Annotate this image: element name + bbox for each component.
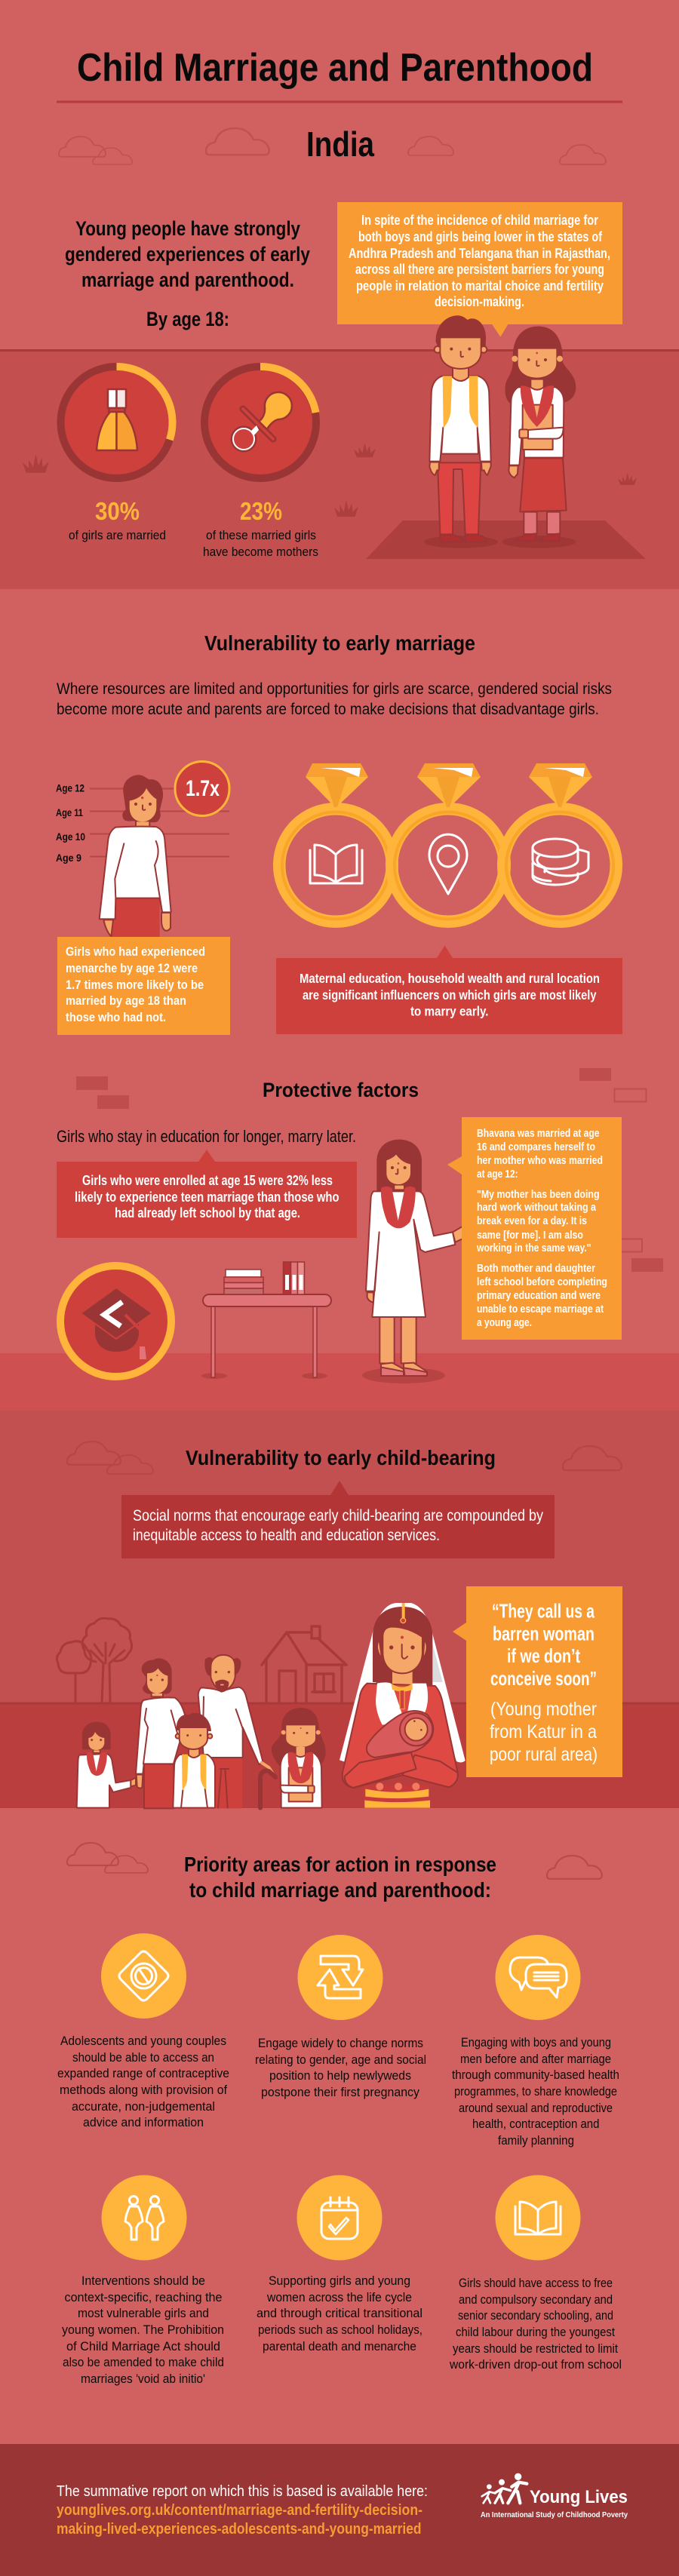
illustration: girl at height chart xyxy=(100,775,171,938)
priority 6: free schooling: and compulsory secondary and xyxy=(459,2292,613,2307)
callout: barren woman quote: conceive soon” xyxy=(490,1667,597,1690)
stat: 23%: of these married girls xyxy=(206,529,316,542)
stat: 30% xyxy=(69,497,166,542)
callout: orange speech box: both boys and girls being lower in the states of xyxy=(358,229,603,244)
footer panel: making-lived-experiences-adolescents-and-young-married xyxy=(57,2521,421,2538)
illustration: family group xyxy=(77,1655,275,1808)
paragraph: limited resources xyxy=(57,680,612,718)
priority 6: free schooling: years should be restricted to limit xyxy=(453,2341,618,2356)
priority 4: context-specific: young women. The Prohibition xyxy=(62,2323,224,2337)
priority 6: free schooling xyxy=(449,2175,622,2372)
callout: Bhavana story xyxy=(447,1117,622,1340)
grandfather xyxy=(198,1655,275,1808)
rings: wealth xyxy=(503,763,616,922)
callout: enrolled at age 15: Girls who were enrolled at age 15 were 32% less xyxy=(82,1173,333,1188)
subtitle: India: India xyxy=(306,124,374,164)
icon: coins xyxy=(533,839,588,885)
callout: menarche: menarche by age 12 were xyxy=(66,961,198,975)
intro text: gendered experiences of early xyxy=(65,243,310,266)
intro text: By age 18: xyxy=(146,308,229,330)
callout: Bhavana story: Both mother and daughter xyxy=(477,1262,595,1275)
illustration: woman pointing xyxy=(362,1140,468,1383)
illustration: table and books xyxy=(201,1262,331,1379)
callout: Bhavana story: same [for me]. I am also xyxy=(477,1229,583,1242)
heading: priority areas xyxy=(184,1853,496,1902)
callout: menarche: 1.7 times more likely to be xyxy=(66,978,204,992)
heading: vulnerability to early marriage: Vulnerability to early marriage xyxy=(204,631,475,655)
priority 4: context-specific: context-specific, reaching the xyxy=(65,2290,222,2304)
illustration: trees xyxy=(57,1618,132,1702)
illustration: teen girl and bride xyxy=(272,1603,465,1808)
teen girl xyxy=(272,1708,326,1808)
callout: Bhavana story: primary education and were xyxy=(477,1289,601,1302)
priority 1: contraceptive methods: methods along with provision of xyxy=(60,2083,227,2097)
priority 5: life cycle support: and through critical transitional xyxy=(257,2306,422,2320)
priority 1: contraceptive methods: advice and information xyxy=(83,2115,204,2129)
callout: barren woman quote: (Young mother xyxy=(490,1699,597,1720)
priority 3: boys and young men: men before and after marriage xyxy=(460,2052,611,2066)
callout: barren woman quote: “They call us a xyxy=(492,1599,595,1622)
callout: Bhavana story: Bhavana was married at age xyxy=(477,1127,599,1140)
icon: prohibition sign xyxy=(119,1951,168,2000)
callout: influencers: are significant influencers on which girls are most likely xyxy=(303,987,597,1002)
callout: influencers xyxy=(276,946,622,1034)
heading: priority areas: Priority areas for action in response xyxy=(184,1853,496,1876)
callout: influencers: to marry early. xyxy=(410,1003,489,1018)
priority 2: change norms xyxy=(255,1935,426,2099)
title: Child Marriage and Parenthood xyxy=(77,46,593,90)
callout: barren woman quote: barren woman xyxy=(493,1622,595,1644)
logo: Young Lives: Young Lives xyxy=(530,2487,628,2507)
priority 2: change norms: postpone their first pregnancy xyxy=(261,2085,419,2099)
priority 1: contraceptive methods: should be able to access an xyxy=(72,2050,214,2065)
priority 1: contraceptive methods: expanded range of contraceptive xyxy=(57,2066,229,2080)
callout: orange speech box: people in relation to marital choice and fertility xyxy=(356,278,604,293)
callout: orange speech box xyxy=(337,202,622,324)
callout: menarche: Girls who had experienced xyxy=(66,944,205,959)
logo: Young Lives: An International Study of Childhood Poverty xyxy=(481,2510,628,2519)
callout: Bhavana story: "My mother has been doing xyxy=(477,1188,599,1201)
icon: two women xyxy=(125,2197,164,2240)
priority 5: life cycle support: Supporting girls and young xyxy=(269,2274,410,2288)
clouds: priority section xyxy=(67,1843,602,1879)
priority 3: boys and young men xyxy=(452,1935,619,2148)
paragraph: limited resources: become more acute and parents are forced to make decisions that disadvantage girls. xyxy=(57,701,599,718)
icon: speech bubbles xyxy=(510,1957,567,1997)
priority 4: context-specific: also be amended to make child xyxy=(63,2355,224,2369)
intro text: marriage and parenthood. xyxy=(81,269,294,291)
boy xyxy=(173,1713,215,1808)
callout: enrolled at age 15: likely to experience teen marriage than those who xyxy=(75,1190,340,1205)
priority 4: context-specific: of Child Marriage Act should xyxy=(66,2339,220,2353)
stat: 30%: 30% xyxy=(95,497,140,525)
priority 4: context-specific xyxy=(62,2175,224,2386)
priority 4: context-specific: Interventions should be xyxy=(81,2274,205,2288)
books: upright xyxy=(284,1262,305,1294)
callout: Bhavana story: unable to escape marriage at xyxy=(477,1303,604,1316)
priority 3: boys and young men: family planning xyxy=(498,2133,574,2148)
callout: Bhavana story: 16 and compares herself to xyxy=(477,1141,595,1153)
callout: barren woman quote: from Katur in a xyxy=(490,1721,597,1742)
age chart labels and lines xyxy=(56,781,229,864)
priority 3: boys and young men: around sexual and reproductive xyxy=(459,2101,613,2115)
paragraph: limited resources: Where resources are limited and opportunities for girls are scarce, gendered social risks xyxy=(57,680,612,698)
age chart labels and lines: Age 9 xyxy=(56,852,81,864)
books: stack xyxy=(224,1270,263,1294)
priority 5: life cycle support: parental death and menarche xyxy=(263,2339,416,2353)
callout: barren woman quote: if we don’t xyxy=(507,1644,580,1667)
age chart labels and lines: Age 11 xyxy=(56,806,83,818)
callout: orange speech box: across all there are persistent barriers for young xyxy=(355,262,604,277)
callout: barren woman quote xyxy=(453,1586,622,1777)
callout: enrolled at age 15 xyxy=(57,1150,357,1238)
clouds: top xyxy=(59,128,606,164)
priority 6: free schooling: senior secondary schooling, and xyxy=(458,2308,613,2323)
stat: 23% xyxy=(203,497,318,559)
priority 2: change norms: position to help newlyweds xyxy=(269,2068,411,2083)
rings: book xyxy=(279,763,392,922)
age chart labels and lines: Age 10 xyxy=(56,831,85,843)
footer panel: younglives.org.uk/content/marriage-and-fertility-decision- xyxy=(57,2502,422,2519)
donut chart: 23% mothers xyxy=(204,367,316,478)
footer panel xyxy=(0,2444,679,2576)
callout: Bhavana story: left school before completing xyxy=(477,1276,607,1288)
priority 5: life cycle support: periods such as school holidays, xyxy=(258,2323,422,2337)
callout: barren woman quote: poor rural area) xyxy=(490,1744,598,1765)
callout: influencers: Maternal education, household wealth and rural location xyxy=(300,971,600,986)
callout: Bhavana story: working in the same way." xyxy=(476,1242,591,1254)
section band: early child-bearing xyxy=(0,1411,679,1808)
badge: 1.7x: 1.7x xyxy=(186,776,220,801)
bride xyxy=(340,1603,465,1808)
logo: Young Lives xyxy=(481,2473,628,2519)
subheading: stay in education: Girls who stay in education for longer, marry later. xyxy=(57,1127,356,1146)
priority 3: boys and young men: programmes, to share knowledge xyxy=(454,2084,617,2099)
boy xyxy=(429,315,491,542)
callout: orange speech box: Andhra Pradesh and Telangana than in Rajasthan, xyxy=(349,246,610,261)
icon: pacifier xyxy=(232,392,292,451)
priority 6: free schooling: work-driven drop-out from school xyxy=(449,2357,622,2372)
classroom floor xyxy=(0,1353,679,1411)
callout: menarche xyxy=(57,937,230,1035)
callout: Bhavana story: break even for a day. It is xyxy=(477,1214,587,1227)
clouds: section four xyxy=(67,1442,622,1474)
stat: 30%: of girls are married xyxy=(69,529,166,542)
illustration: house xyxy=(262,1626,346,1702)
grass tufts xyxy=(23,443,637,517)
donut chart: 30% married xyxy=(60,367,173,478)
background bricks xyxy=(76,1068,663,1272)
priority 5: life cycle support: women across the life cycle xyxy=(266,2290,412,2304)
callout: enrolled at age 15: had already left school by that age. xyxy=(115,1205,300,1220)
footer panel: The summative report on which this is based is available here: xyxy=(57,2483,428,2500)
callout: orange speech box: In spite of the incidence of child marriage for xyxy=(361,213,598,228)
illustration: boy and girl xyxy=(424,315,576,548)
priority 1: contraceptive methods: Adolescents and young couples xyxy=(60,2034,226,2048)
callout: social norms xyxy=(121,1481,555,1558)
callout: Bhavana story: at age 12: xyxy=(477,1168,518,1181)
callout: menarche: married by age 18 than xyxy=(66,993,186,1008)
young girl xyxy=(77,1722,136,1808)
icon: map pin xyxy=(429,834,467,894)
stat: 23%: have become mothers xyxy=(203,545,318,559)
callout: Bhavana story: her mother who was married xyxy=(477,1154,603,1167)
girl xyxy=(505,327,576,541)
callout: menarche: those who had not. xyxy=(66,1010,166,1024)
lower band: intro ground xyxy=(0,349,679,589)
priority 4: context-specific: most vulnerable girls and xyxy=(78,2306,209,2320)
callout: Bhavana story: hard work without taking a xyxy=(477,1201,597,1214)
intro text xyxy=(65,217,310,330)
priority 2: change norms: relating to gender, age and social xyxy=(255,2053,426,2067)
rings: location xyxy=(392,763,505,922)
heading: priority areas: to child marriage and parenthood: xyxy=(189,1878,491,1902)
priority 1: contraceptive methods xyxy=(57,1933,229,2129)
callout: social norms: Social norms that encourage early child-bearing are compounded by xyxy=(133,1507,543,1524)
callout: orange speech box: decision-making. xyxy=(435,294,524,309)
callout: Bhavana story: a young age. xyxy=(477,1316,532,1329)
icon: open book xyxy=(310,845,362,883)
priority 3: boys and young men: through community-based health xyxy=(452,2068,619,2082)
icon: exchange arrows xyxy=(318,1956,363,1998)
badge: 1.7x xyxy=(175,762,229,816)
priority 1: contraceptive methods: accurate, non-judgemental xyxy=(72,2099,215,2114)
age chart labels and lines: Age 12 xyxy=(56,781,84,794)
icon: dress xyxy=(97,389,137,450)
heading: protective factors: Protective factors xyxy=(263,1079,419,1101)
priority 4: context-specific: marriages 'void ab initio' xyxy=(81,2372,205,2386)
priority 5: life cycle support xyxy=(257,2175,422,2353)
floor mat xyxy=(366,520,646,559)
callout: social norms: inequitable access to health and education services. xyxy=(133,1527,440,1544)
icon: calendar xyxy=(321,2197,358,2239)
icon: book xyxy=(515,2202,561,2234)
priority 6: free schooling: Girls should have access to free xyxy=(459,2276,613,2290)
heading: vulnerability to early child-bearing: Vulnerability to early child-bearing xyxy=(186,1446,496,1469)
priority 3: boys and young men: health, contraception and xyxy=(472,2117,599,2131)
priority 6: free schooling: child labour during the youngest xyxy=(456,2325,615,2339)
intro text: Young people have strongly xyxy=(75,217,300,240)
stat: 23%: 23% xyxy=(240,497,282,525)
badge: graduation cap xyxy=(60,1266,171,1377)
priority 3: boys and young men: Engaging with boys and young xyxy=(461,2035,611,2049)
priority 2: change norms: Engage widely to change norms xyxy=(258,2036,423,2050)
grandmother xyxy=(136,1658,186,1808)
